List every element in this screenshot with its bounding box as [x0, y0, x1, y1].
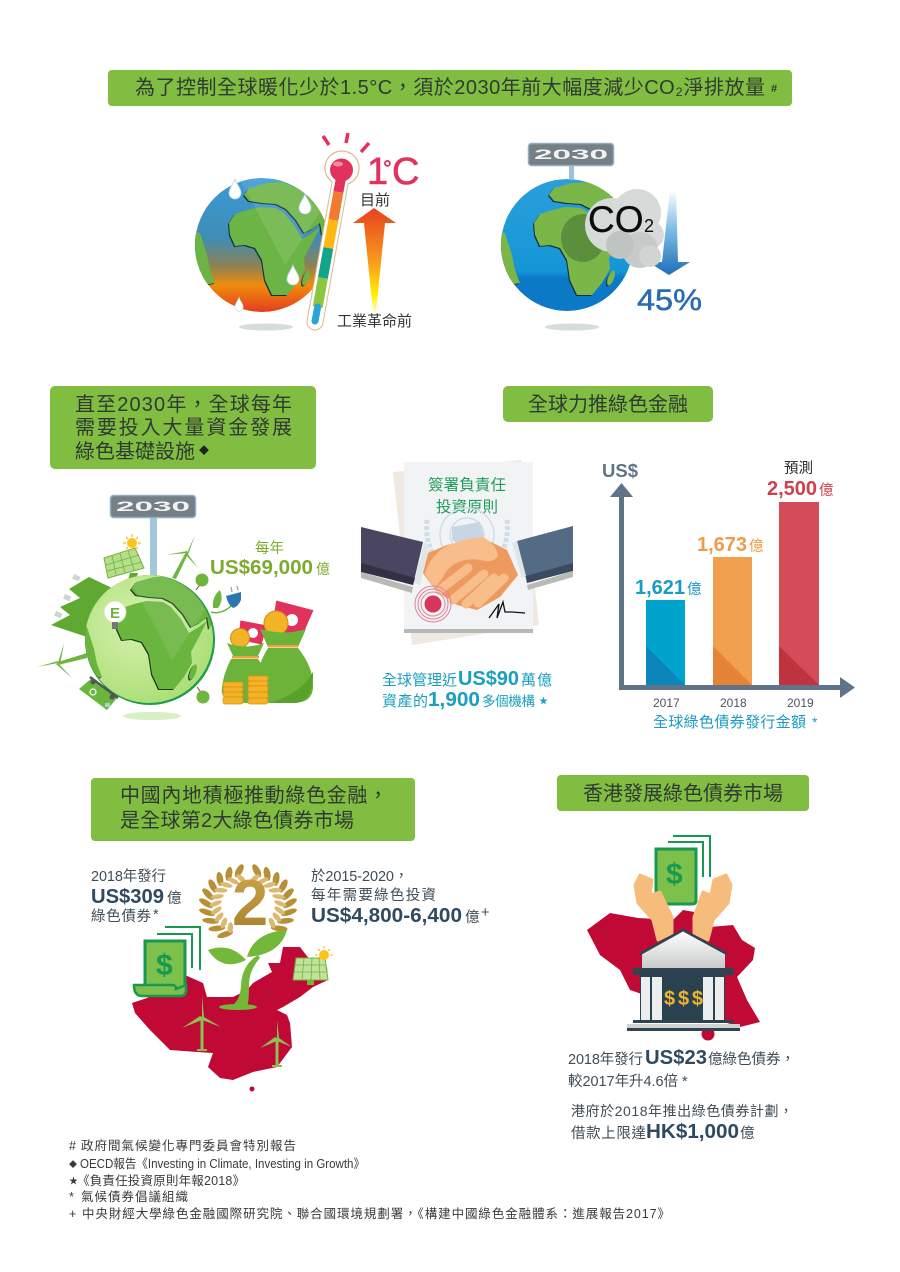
icon: seedling: [208, 930, 287, 1010]
heading: mainland China: 是全球第2大綠色債券市場: [120, 809, 354, 832]
bar: 2019 forecast: [767, 460, 834, 710]
text: 2018 issuance: 2018年發行: [91, 868, 166, 885]
bar: 2018: 億: [749, 538, 764, 555]
arrow: reduction: [648, 190, 690, 275]
title banner: [108, 70, 792, 106]
text: annual investment: 於2015-2020: [311, 868, 394, 885]
footnotes: 中央財經大學綠色金融國際研究院、聯合國環境規劃署，《構建中國綠色金融體系：進展報告2017》: [82, 1206, 670, 1221]
bar: 2018: 1,673: [697, 534, 747, 556]
caption: institutions: ★: [539, 696, 548, 706]
illustration: green earth: [37, 496, 330, 720]
caption: chart title: *: [812, 714, 818, 730]
bar chart: green bond issuance: [602, 460, 855, 731]
icon: bank building: [627, 930, 740, 1031]
label: annual investment: 億: [316, 561, 330, 577]
text: 2018 issuance: *: [153, 907, 159, 923]
globe: earth: [494, 179, 633, 311]
text: 2018 issuance: 綠色債券: [91, 908, 152, 925]
cloud: CO2: 2: [644, 216, 654, 236]
heading: infrastructure: [50, 386, 316, 469]
label: annual investment: US$69,000: [210, 557, 313, 579]
text: HK issuance: 較2017年升4.6倍: [568, 1072, 678, 1090]
footnotes: ◆: [69, 1160, 77, 1169]
footnotes: 《負責任投資原則年報2018》: [77, 1173, 245, 1188]
globe: warming earth: [189, 178, 329, 312]
footnotes: *: [69, 1190, 74, 1204]
label: 1°C: °: [383, 156, 392, 181]
icon: open hands: [635, 875, 731, 940]
sign: 2030: [110, 496, 196, 576]
thermometer: [315, 133, 369, 322]
icon: green bond: $: [666, 858, 683, 891]
footnotes: +: [69, 1207, 76, 1221]
caption: chart title: 全球綠色債券發行金額: [653, 714, 806, 731]
label: pre-industrial: 工業革命前: [337, 312, 412, 330]
title banner: #: [771, 83, 777, 95]
icon: money bags: [222, 600, 314, 704]
icon: solar panel: [104, 534, 144, 580]
label: axis unit: US$: [602, 460, 639, 481]
icon: laurel wreath with rank 2: 2: [232, 866, 268, 939]
icon: trees and plug: [196, 574, 241, 704]
map: Hong Kong: [587, 910, 760, 1040]
cloud: CO2: [585, 189, 664, 268]
globe: green earth: [76, 575, 215, 705]
bar: 2019 forecast: 預測: [784, 460, 813, 477]
icon: bank building: $$$: [664, 988, 703, 1010]
icon: green bond: [656, 836, 710, 904]
heading: global push: [503, 386, 713, 422]
icon: light bulb: [104, 601, 126, 629]
illustration: Hong Kong bank: [568, 836, 795, 1143]
footnotes: #: [69, 1139, 76, 1153]
icon: handshake: [361, 526, 573, 610]
illustration: 2030 globe with CO2 cut: [494, 144, 702, 330]
sign: 2030: 2030: [116, 498, 190, 514]
illustration: warming globe with thermometer: [189, 133, 419, 330]
bar: 2019 forecast: 億: [819, 482, 834, 499]
label: current: 目前: [360, 192, 390, 209]
caption: institutions: 1,900: [428, 688, 480, 711]
icon: green bond: [134, 927, 200, 996]
heading: global push: 全球力推綠色金融: [528, 393, 688, 416]
icon: wind turbines: [182, 995, 292, 1067]
heading: Hong Kong: [557, 775, 809, 811]
text: HK government programme: 借款上限達: [571, 1125, 646, 1142]
sign: 2030: 2030: [534, 146, 608, 162]
bar: 2018: 2018: [720, 696, 747, 710]
text: HK issuance: [568, 1047, 795, 1090]
text: HK government programme: [571, 1103, 793, 1143]
arrow: temperature rise: [353, 208, 396, 312]
text: HK government programme: HK$1,000: [646, 1120, 739, 1143]
text: annual investment: +: [481, 905, 489, 921]
heading: infrastructure: 綠色基礎設施: [75, 440, 195, 463]
heading: mainland China: 中國內地積極推動綠色金融，: [120, 784, 388, 807]
caption: institutions: 萬億: [521, 672, 552, 689]
caption: institutions: [382, 668, 552, 711]
text: document title: [428, 476, 506, 516]
icon: water drops: [229, 179, 311, 311]
label: annual investment: 每年: [255, 540, 284, 557]
footnotes: OECD報告《Investing in Climate, Investing in Growth》: [80, 1157, 365, 1171]
text: 2018 issuance: 億: [167, 890, 182, 907]
label: 1°C: C: [392, 151, 419, 193]
bar: 2017: 1,621: [635, 577, 685, 599]
caption: institutions: 多個機構: [482, 694, 536, 709]
sign: 2030: [528, 144, 614, 179]
heading: infrastructure: 需要投入大量資金發展: [75, 416, 292, 439]
caption: institutions: US$90: [458, 668, 519, 690]
label: 45%: 45%: [637, 284, 702, 317]
bar: 2017: 2017: [653, 696, 680, 710]
text: HK issuance: 2018年發行: [568, 1051, 643, 1068]
footnotes: 氣候債券倡議組織: [81, 1189, 188, 1204]
text: document title: 投資原則: [436, 498, 498, 516]
text: HK issuance: US$23: [645, 1047, 707, 1069]
cloud: CO2: CO: [588, 199, 644, 240]
illustration: signed principles document: [361, 460, 573, 711]
icon: signature: [489, 602, 525, 618]
icon: UN emblem: [427, 508, 507, 570]
text: document title: 簽署負責任: [428, 476, 506, 494]
illustration: China map: [91, 862, 489, 1092]
text: HK government programme: 港府於2018年推出綠色債券計劃，: [571, 1103, 793, 1119]
label: 1°C: [367, 151, 419, 193]
footnotes: ★: [69, 1176, 78, 1186]
icon: green bond: $: [156, 949, 173, 982]
axes: [610, 483, 855, 698]
caption: institutions: 全球管理近: [382, 671, 457, 689]
icon: factory: [51, 574, 112, 637]
text: HK issuance: *: [682, 1074, 688, 1090]
bar: 2018: [697, 534, 764, 710]
bar: 2019 forecast: 2019: [787, 696, 814, 710]
icon: recycling truck: [79, 677, 118, 710]
text: HK issuance: 億綠色債券，: [708, 1051, 795, 1068]
text: HK government programme: 億: [740, 1125, 754, 1142]
heading: Hong Kong: 香港發展綠色債券市場: [583, 782, 783, 805]
text: 2018 issuance: US$309: [91, 886, 164, 908]
label: 1°C: 1: [367, 151, 388, 193]
icon: red stamp: [415, 586, 451, 622]
title banner: 為了控制全球暖化少於1.5°C，須於2030年前大幅度減少CO₂淨排放量: [135, 76, 765, 99]
icon: wind turbines: [37, 535, 198, 678]
bar: 2017: [635, 577, 702, 710]
text: annual investment: US$4,800-6,400: [311, 905, 462, 927]
label: annual investment: [210, 540, 330, 579]
icon: solar panel: [293, 946, 333, 985]
text: 2018 issuance: [91, 868, 182, 925]
text: annual investment: ，: [394, 869, 408, 885]
caption: institutions: 資產的: [382, 693, 428, 710]
footnotes: [69, 1138, 670, 1221]
footnotes: 政府間氣候變化專門委員會特別報告: [81, 1138, 296, 1153]
bar: 2019 forecast: 2,500: [767, 478, 817, 500]
text: annual investment: 億: [465, 909, 480, 926]
icon: laurel wreath with rank 2: [197, 862, 299, 944]
icon: light bulb: E: [110, 605, 120, 622]
heading: infrastructure: ◆: [199, 445, 209, 457]
text: annual investment: 每年需要綠色投資: [311, 887, 436, 904]
heading: infrastructure: 直至2030年，全球每年: [75, 393, 292, 416]
bar: 2017: 億: [687, 581, 702, 598]
text: annual investment: [311, 868, 489, 927]
map: China: [132, 947, 328, 1092]
heading: mainland China: [91, 778, 415, 841]
